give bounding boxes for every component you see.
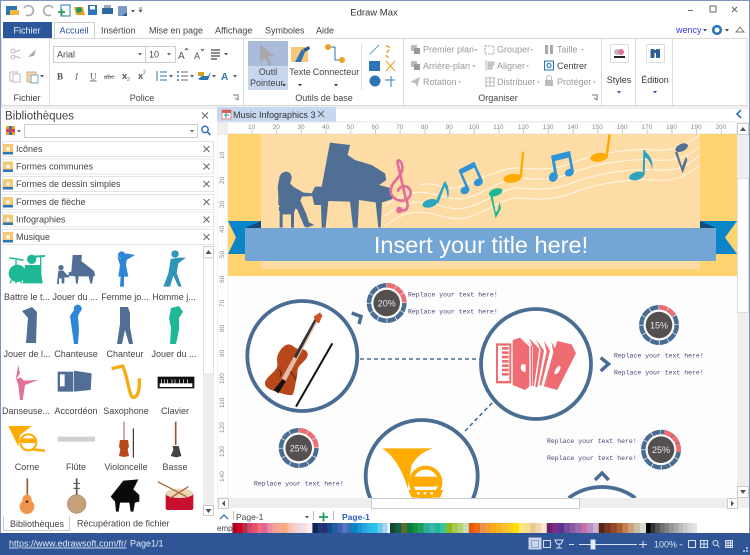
horizontal ruler: 10: [248, 124, 256, 131]
donut: 25% left: 25%: [290, 444, 308, 454]
circle: horn: [364, 418, 480, 498]
horizontal ruler: 20: [273, 124, 280, 131]
horizontal ruler: 180: [666, 124, 677, 131]
labels row 1: [4, 292, 196, 302]
icon: dancer: [16, 365, 38, 400]
menu tabs: Mise en page: [149, 26, 203, 36]
library rows: Formes de flèche: [16, 197, 86, 207]
horizontal ruler: 70: [396, 124, 404, 131]
ribbon group: Police: A: [194, 51, 200, 61]
window controls: [688, 6, 737, 12]
menu tabs: Affichage: [215, 26, 252, 36]
vertical ruler: 100: [219, 373, 226, 384]
ribbon group: Organiser: [410, 44, 597, 103]
text: 20%: Replace your text here!: [408, 308, 498, 316]
vertical ruler: 110: [219, 397, 226, 408]
labels rows 3 and 4: Accordéon: [54, 406, 98, 416]
icon: guitar: [20, 478, 34, 514]
ribbon group: Police: A: [221, 72, 228, 83]
vertical ruler: 30: [219, 200, 226, 208]
ribbon group: Police: I: [74, 72, 79, 82]
horizontal ruler: 150: [592, 124, 603, 131]
ribbon group: Outils de base: Texte: [289, 67, 311, 77]
circle: accordion: [481, 309, 591, 419]
icon: pianist and grand piano: [278, 143, 392, 228]
ribbon: [1, 38, 749, 109]
panel heading: Bibliothèques: [5, 110, 74, 122]
ribbon group: Organiser: Premier plan: [423, 44, 474, 54]
title banner: [245, 228, 716, 261]
page tabs: Page-1: [236, 512, 264, 522]
ribbon group: Organiser: Grouper: [497, 44, 530, 54]
arrow: accordion to 15%: [601, 358, 608, 371]
text: 15%: Replace your text here!: [614, 352, 704, 360]
icon: keyboard: [158, 377, 194, 388]
labels row 2: Jouer de l...: [3, 349, 51, 359]
quick access toolbar: [6, 5, 142, 16]
vertical ruler: 120: [219, 422, 226, 433]
ribbon group: Organiser: Rotation: [423, 77, 457, 87]
library rows: [2, 142, 214, 244]
ribbon group: Outils de base: [248, 41, 395, 103]
library scrollbar: [203, 246, 214, 516]
canvas: [228, 134, 737, 532]
document tab bar: [217, 107, 741, 122]
horizontal ruler: 160: [617, 124, 628, 131]
banner background: [228, 134, 737, 276]
user account: [675, 25, 744, 35]
icon: drummer: [9, 255, 45, 283]
icons row 2: [22, 305, 183, 344]
labels row 1: Homme j...: [152, 292, 196, 302]
vertical ruler: 40: [219, 225, 226, 233]
horizontal ruler: 110: [493, 124, 504, 131]
horizontal ruler: 130: [543, 124, 554, 131]
ribbon group: Organiser: Organiser: [478, 93, 518, 103]
labels rows 3 and 4: [2, 406, 189, 472]
text: 20%: [408, 292, 498, 316]
page tabs: [220, 511, 370, 522]
horizontal ruler: 170: [641, 124, 653, 131]
status bar: [0, 533, 750, 555]
labels rows 3 and 4: Danseuse...: [2, 406, 50, 416]
donut: 15%: 15%: [650, 320, 668, 330]
colour palette: [217, 523, 695, 533]
labels row 2: Chanteur: [106, 349, 144, 359]
status bar: https://www.edrawsoft.com/fr/: [9, 538, 127, 548]
icon: grand piano: [111, 479, 139, 512]
circle: bottom: [569, 487, 635, 498]
page tabs: Page-1: [342, 512, 370, 522]
ribbon group: Outils de base: Pointeur: [250, 78, 284, 88]
horizontal ruler: 50: [347, 124, 354, 131]
text: 15%: Replace your text here!: [614, 370, 704, 376]
ribbon group: Police: abc: [104, 72, 115, 81]
ribbon group: Police: x: [138, 71, 143, 81]
colour palette: emp: [217, 524, 233, 533]
menu tabs: [3, 22, 334, 38]
donut: 20%: 20%: [378, 298, 396, 308]
donut: 25% left: [281, 430, 316, 466]
ribbon group: Police: B: [57, 72, 63, 82]
text: 20%: Replace your text here!: [408, 292, 498, 298]
icon: violin: [119, 422, 133, 458]
ribbon group: Police: 2: [143, 70, 146, 76]
ribbon group: Police: x: [122, 71, 127, 81]
ribbon group: Fichier: Fichier: [13, 93, 41, 103]
icon: horn: [8, 426, 45, 452]
arrow: up chevron: [595, 473, 609, 480]
ribbon group: Organiser: Centrer: [557, 61, 587, 71]
vertical ruler: 90: [219, 349, 226, 357]
labels row 2: Chanteuse: [54, 349, 98, 359]
ribbon group: Edition: Édition: [641, 75, 669, 85]
ribbon group: Organiser: Protéger: [557, 77, 592, 87]
horizontal ruler: 190: [691, 124, 702, 131]
labels rows 3 and 4: Clavier: [161, 406, 189, 416]
menu tabs: Symboles: [265, 26, 305, 36]
ribbon group: Styles: [607, 44, 632, 94]
ribbon group: Organiser: Distribuer: [497, 77, 536, 87]
window title: Edraw Max: [350, 8, 398, 18]
vertical ruler: 70: [219, 299, 226, 307]
panel: libraries: [1, 109, 217, 533]
ribbon group: Police: [54, 46, 238, 103]
menu tabs: Insértion: [101, 26, 136, 36]
labels rows 3 and 4: Flûte: [66, 462, 86, 472]
document tab bar: Music Infographics 3: [233, 110, 316, 120]
text: 15%: [614, 352, 704, 376]
horizontal ruler: 40: [322, 124, 330, 131]
horizontal ruler: 80: [421, 124, 429, 131]
ribbon group: Outils de base: Outil: [259, 67, 277, 77]
donut: 25% right: [640, 429, 682, 470]
ribbon group: Edition: [641, 44, 669, 94]
icon: piano player: [57, 255, 95, 284]
labels row 1: Battre le t...: [4, 292, 50, 302]
labels row 1: Jouer du ...: [52, 292, 98, 302]
vertical ruler: 20: [219, 176, 226, 184]
ribbon group: Police: Police: [130, 93, 154, 103]
library rows: Infographies: [16, 214, 66, 224]
icon: accordion: [58, 371, 92, 392]
panel tabs: Bibliothèques: [10, 519, 65, 529]
ribbon group: Outils de base: Outils de base: [295, 93, 353, 103]
icon: flute: [58, 437, 95, 442]
library rows: Formes communes: [16, 162, 94, 172]
ribbon group: Police: 2: [127, 77, 130, 83]
labels rows 3 and 4: Violoncelle: [104, 462, 148, 472]
labels row 2: [3, 349, 197, 359]
donut: 20%: [369, 285, 404, 321]
menu tabs: Fichier: [13, 26, 41, 36]
vertical ruler: 60: [219, 275, 226, 283]
labels row 1: Femme jo...: [101, 292, 149, 302]
icon: woman violinist: [117, 251, 135, 287]
vertical scrollbar: [737, 122, 749, 498]
ribbon group: Outils de base: Connecteur: [313, 67, 359, 77]
vertical ruler: [217, 134, 228, 498]
icons rows 3 and 4: [8, 365, 194, 514]
text: 25% right: Replace your text here!: [547, 438, 637, 445]
horizontal ruler: 200: [716, 124, 727, 131]
status controls: [528, 538, 732, 550]
circle: violin: [247, 301, 357, 411]
icon: bass: [171, 422, 181, 457]
staff lines: [385, 135, 700, 226]
ribbon tails: [228, 221, 737, 254]
icon: drum: [158, 482, 193, 510]
user account: wency: [675, 25, 702, 35]
search bar: [6, 124, 210, 138]
horizontal ruler: 90: [446, 124, 453, 131]
ribbon group: Police: U: [90, 72, 97, 82]
labels rows 3 and 4: Basse: [162, 462, 188, 472]
labels rows 3 and 4: Corne: [15, 462, 39, 472]
arrow: violin to 20%: [352, 313, 361, 324]
horizontal ruler: [217, 122, 737, 134]
vertical ruler: 10: [219, 151, 226, 159]
icon: treble clef: [391, 160, 411, 213]
horizontal scrollbar: [217, 498, 749, 508]
icon: ruan: [67, 478, 86, 513]
horizontal ruler: 60: [372, 124, 379, 131]
vertical ruler: 130: [219, 446, 226, 457]
vertical ruler: 50: [219, 250, 226, 258]
panel tabs: Récupération de fichier: [77, 518, 170, 528]
status bar: 100%: [654, 540, 677, 550]
donut: 25% right: 25%: [652, 445, 670, 455]
labels rows 3 and 4: Saxophone: [103, 406, 149, 416]
horizontal ruler: 30: [297, 124, 305, 131]
connector lines: [360, 359, 494, 431]
ribbon group: Organiser: Aligner: [497, 61, 525, 71]
icon: man violinist: [163, 250, 186, 287]
menu tabs: Accueil: [59, 26, 89, 36]
horizontal ruler: 140: [567, 124, 579, 131]
horizontal ruler: 120: [518, 124, 529, 131]
vertical ruler: 140: [219, 471, 226, 482]
panel tabs: [4, 516, 170, 530]
ribbon group: Organiser: Taille: [557, 44, 578, 54]
text: 25% left: Replace your text here!: [254, 480, 344, 488]
ribbon group: Styles: Styles: [607, 75, 632, 85]
icon: saxophone: [112, 366, 139, 397]
ribbon group: Organiser: Arrière-plan: [423, 61, 470, 71]
library rows: Formes de dessin simples: [16, 179, 121, 189]
labels row 2: Jouer du ...: [151, 349, 197, 359]
ribbon group: Police: A: [178, 51, 185, 62]
horizontal ruler: 100: [468, 124, 480, 131]
vertical ruler: 80: [219, 324, 226, 332]
icons: music notes: [422, 162, 484, 209]
library rows: Musique: [16, 232, 50, 242]
status bar: Page1/1: [130, 538, 164, 548]
donut: 15%: [641, 307, 677, 343]
title banner: Insert your title here!: [374, 232, 588, 258]
ribbon group: Police: 10: [149, 50, 159, 60]
ribbon group: Fichier: [10, 49, 44, 103]
text: 25% right: Replace your text here!: [547, 455, 637, 462]
menu tabs: Aide: [316, 26, 334, 36]
library rows: Icônes: [16, 144, 43, 154]
ribbon group: Police: Arial: [57, 50, 75, 60]
text: 25% right: [547, 438, 637, 462]
